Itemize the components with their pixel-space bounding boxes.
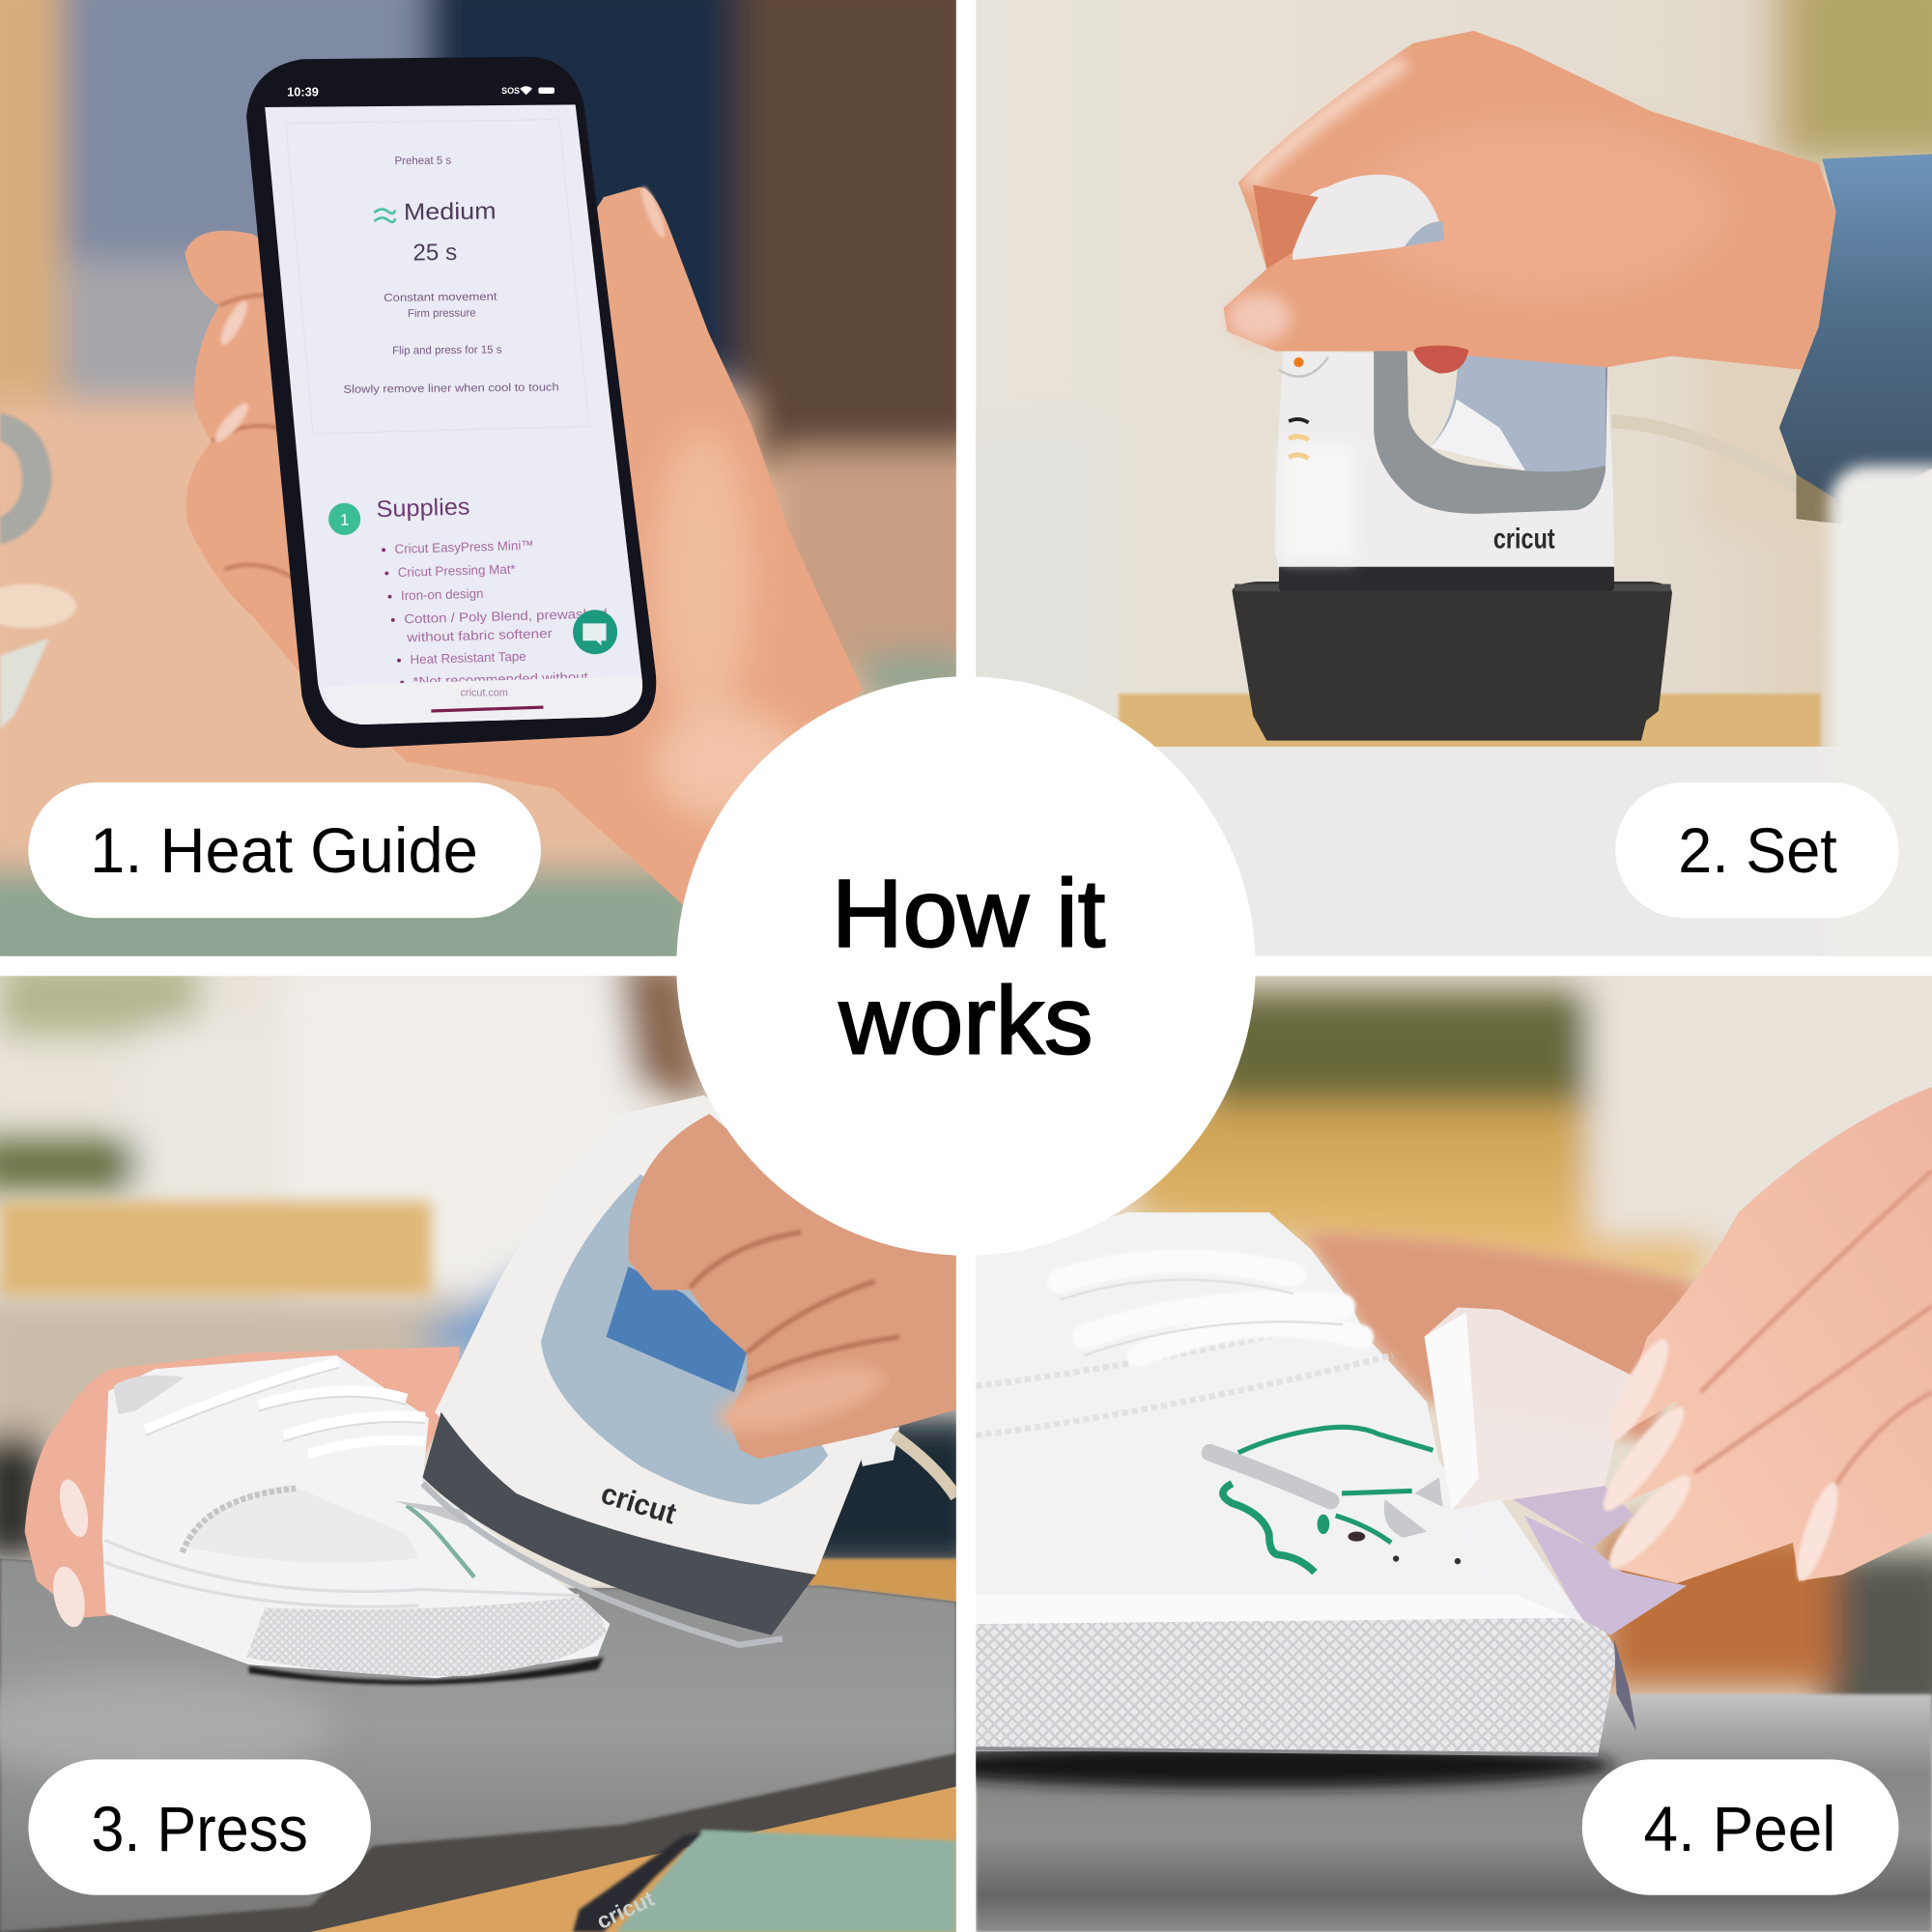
- mini press iron: [1275, 352, 1614, 573]
- phone screen supplies list: Cotton / Poly Blend, prewashed: [404, 606, 608, 626]
- phone screen heat guide text: 25 s: [412, 240, 457, 266]
- table top: [1119, 694, 1821, 751]
- title text: How it: [832, 861, 1105, 968]
- hand holding phone: [185, 185, 863, 906]
- mini press iron tilted: [423, 1095, 956, 1645]
- label: 2. Set: 2. Set: [1678, 815, 1837, 887]
- blurred room background: [0, 961, 985, 1571]
- blurred room background: [1133, 961, 1932, 1725]
- heat press base: [1233, 564, 1672, 741]
- green instruction card: [573, 1830, 956, 1932]
- phone screen heat guide text: [341, 154, 559, 396]
- panel: step 4 peel photo: [899, 961, 1932, 1932]
- hand holding shoe: [25, 1347, 460, 1630]
- power cord: [1611, 421, 1811, 496]
- fingers peeling film: [1593, 1087, 1932, 1584]
- phone screen heat guide text: Firm pressure: [408, 307, 476, 320]
- phone screen heat guide text: Constant movement: [384, 292, 498, 304]
- panel: step 3 press photo: [0, 961, 985, 1932]
- phone screen heat guide text: Flip and press for 15 s: [392, 344, 502, 357]
- forearm: [1305, 1234, 1695, 1441]
- phone screen supplies list: Iron-on design: [401, 586, 484, 603]
- phone: cricut.com: [461, 688, 508, 699]
- label: 3. Press: 3. Press: [91, 1794, 308, 1865]
- phone screen heat guide text: Slowly remove liner when cool to touch: [343, 382, 559, 396]
- phone status bar: 10:39: [287, 84, 319, 99]
- sneaker: [102, 1355, 610, 1685]
- phone screen supplies list: Cricut EasyPress Mini™: [394, 538, 534, 556]
- hand gripping iron: [629, 1114, 965, 1459]
- blurred room background: [0, 0, 985, 992]
- pressing mat: [0, 1559, 956, 1932]
- mini press iron tilted: cricut: [597, 1477, 680, 1531]
- hand gripping press: [1224, 31, 1836, 374]
- sneaker close-up: [899, 1212, 1616, 1788]
- label: 2. Set: [1615, 782, 1899, 918]
- mat surface: [976, 1694, 1932, 1932]
- phone screen supplies list: 1: [340, 511, 350, 529]
- label: 4. Peel: 4. Peel: [1644, 1794, 1836, 1865]
- mug and keyboard on desk: [0, 412, 76, 729]
- wooden table: [788, 1559, 961, 1608]
- center circle title: [676, 676, 1256, 1256]
- phone screen supplies list: without fabric softener: [406, 626, 554, 644]
- phone status bar: SOS: [501, 86, 520, 96]
- phone status bar: [288, 86, 554, 97]
- phone screen heat guide text: Preheat 5 s: [394, 156, 451, 167]
- phone screen supplies list: Cricut Pressing Mat*: [398, 562, 516, 580]
- phone screen supplies list: [327, 490, 610, 691]
- peeling transparent film: [1424, 1307, 1687, 1731]
- denim sleeve: [1779, 154, 1932, 524]
- mini press iron: cricut: [1493, 524, 1555, 555]
- title text: works: [838, 968, 1093, 1075]
- phone screen heat guide text: Medium: [404, 198, 497, 225]
- chat button: [573, 610, 617, 654]
- panel: step 1 heat guide photo: [0, 0, 985, 992]
- phone screen supplies list: Supplies: [376, 494, 470, 523]
- panel: step 2 set photo: [949, 0, 1932, 983]
- phone: [246, 57, 656, 748]
- title text: [832, 861, 1105, 1075]
- label: 3. Press: [28, 1759, 371, 1895]
- phone screen supplies list: Heat Resistant Tape: [410, 649, 526, 667]
- label: 1. Heat Guide: [28, 782, 541, 918]
- blurred room background: [949, 0, 1932, 715]
- iron-on design on shoe: [1210, 1427, 1461, 1573]
- phone screen supplies list: *Not recommended without: [412, 669, 588, 689]
- label: 1. Heat Guide: 1. Heat Guide: [90, 815, 478, 887]
- label: 4. Peel: [1582, 1759, 1899, 1895]
